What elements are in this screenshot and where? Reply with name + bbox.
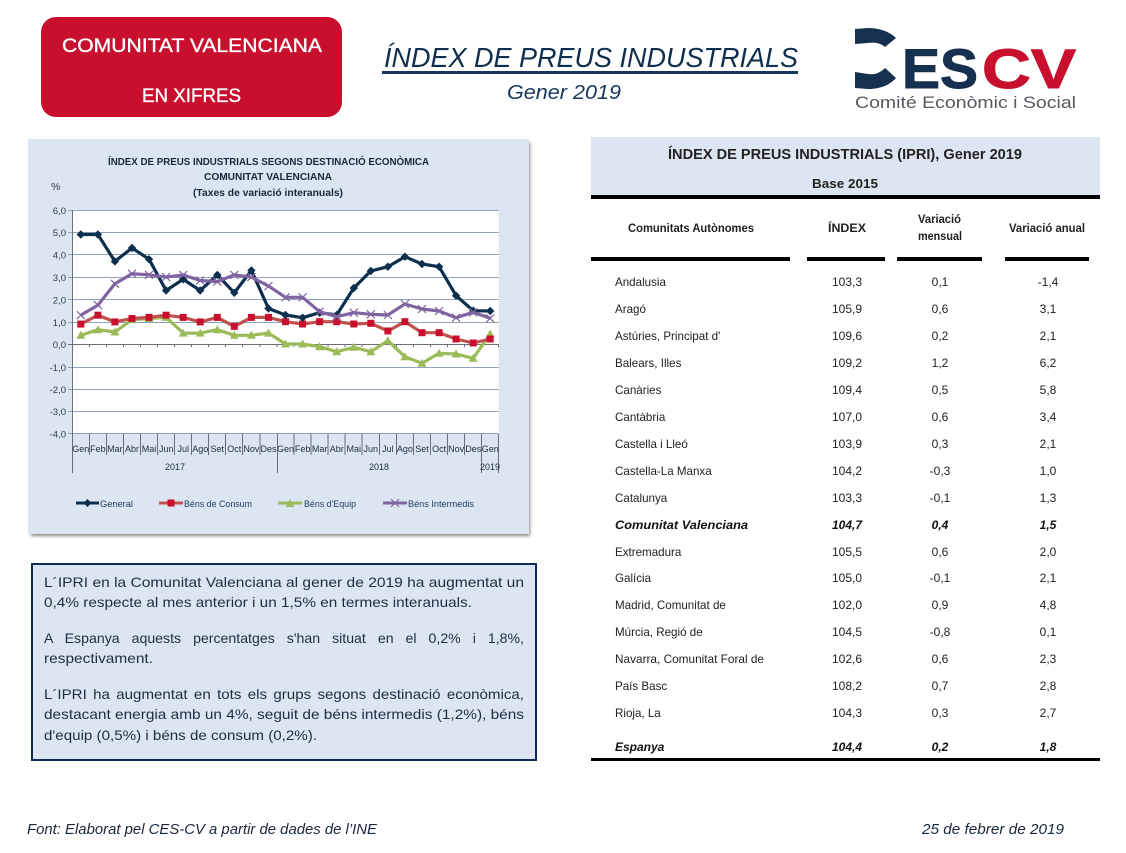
rows: Castella i Lleó	[615, 438, 688, 451]
x axis month labels: Des	[465, 444, 482, 454]
rows: 104,3	[832, 706, 862, 720]
gridlines and axes	[68, 210, 499, 473]
x axis month labels: Feb	[295, 444, 310, 454]
y axis labels: 0,0	[53, 340, 66, 351]
y axis labels: 6,0	[53, 206, 66, 217]
rows: 1,2	[932, 356, 949, 370]
rows: 109,2	[832, 356, 862, 370]
series: Béns de Consum	[81, 315, 490, 343]
rows: Andalusia	[615, 276, 666, 289]
paragraph 3: destacant energia amb un 4%, seguit de béns intermedis (1,2%), béns	[44, 706, 524, 722]
rows: 1,3	[1040, 491, 1057, 505]
column headers: mensual	[918, 231, 962, 243]
x axis month labels: Jun	[364, 444, 378, 454]
x axis month labels: Oct	[227, 444, 242, 454]
rows: 2,1	[1040, 437, 1057, 451]
paragraph 1: L´IPRI en la Comunitat Valenciana al gener de 2019 ha augmentat un	[44, 574, 524, 590]
rows: 0,1	[1040, 625, 1057, 639]
x axis month labels: Feb	[90, 444, 106, 454]
x axis month labels: Jun	[159, 444, 173, 454]
column headers: Variació anual	[1009, 223, 1085, 235]
x axis month labels: Set	[415, 444, 429, 454]
x axis month labels: Gen	[277, 444, 294, 454]
x axis month labels: Abr	[330, 444, 344, 454]
rows: 1,5	[1040, 518, 1057, 532]
series: Béns Intermedis	[81, 274, 490, 318]
y axis labels: 2,0	[53, 296, 66, 306]
rows: Extremadura	[615, 546, 682, 559]
rows: -0,1	[930, 571, 951, 585]
rows: 0,1	[932, 275, 949, 289]
subtitle: date: Gener 2019	[507, 81, 621, 104]
rows: 102,6	[832, 652, 862, 666]
rows: 109,4	[832, 383, 862, 397]
rows: Castella-La Manxa	[615, 465, 712, 478]
rows: -0,8	[930, 625, 951, 639]
total row: Espanya: 104,4	[832, 740, 862, 754]
table header band: Base 2015	[812, 176, 878, 191]
legend item: General	[76, 499, 133, 510]
badge: Comunitat Valenciana en xifres	[41, 17, 342, 117]
paragraph 3: d'equip (0,5%) i béns de consum (0,2%).	[44, 727, 317, 743]
rows: Balears, Illes	[615, 357, 682, 370]
total row: Espanya: 0,2	[932, 740, 949, 754]
x axis month labels: Nov	[448, 444, 465, 454]
legend item: Béns de Consum	[159, 499, 252, 510]
y axis labels	[50, 206, 66, 440]
y axis labels: -1,0	[50, 363, 66, 374]
rows: 2,8	[1040, 679, 1057, 693]
rows: 3,1	[1040, 302, 1057, 316]
rows: 105,9	[832, 302, 862, 316]
rows: 0,6	[932, 545, 949, 559]
rows: 6,2	[1040, 356, 1057, 370]
footer: source: Font: Elaborat pel CES-CV a partir de dades de l’INE	[27, 821, 378, 838]
legend item: Béns Intermedis: Béns Intermedis	[408, 499, 474, 510]
rows: 2,7	[1040, 706, 1057, 720]
rows: Múrcia, Regió de	[615, 626, 703, 639]
rows: -1,4	[1038, 275, 1059, 289]
rows: 1,0	[1040, 464, 1057, 478]
rows: 103,3	[832, 491, 862, 505]
y axis labels: 1,0	[53, 318, 66, 329]
rows: 107,0	[832, 410, 862, 424]
badge: Comunitat Valenciana en xifres: EN XIFRES	[142, 85, 241, 107]
table bottom rule	[591, 758, 1100, 761]
x axis month labels: Des	[260, 444, 277, 454]
rows: 0,3	[932, 437, 949, 451]
x axis month labels: Mai	[347, 444, 361, 454]
rows: 104,5	[832, 625, 862, 639]
rows: País Basc	[615, 680, 667, 693]
rows: 109,6	[832, 329, 862, 343]
chart title: ÍNDEX DE PREUS INDUSTRIALS SEGONS DESTINACIÓ ECONÒMICA	[108, 155, 429, 168]
rows: 2,1	[1040, 329, 1057, 343]
table header band: ÍNDEX DE PREUS INDUSTRIALS (IPRI), Gener 2019	[668, 146, 1022, 163]
x axis year labels: 2018	[369, 462, 389, 472]
rows: Galícia	[615, 572, 652, 585]
series: General	[81, 234, 490, 318]
rows: 0,9	[932, 598, 949, 612]
table header band	[591, 137, 1100, 199]
legend	[76, 499, 474, 510]
column headers: Variació	[918, 214, 961, 226]
rows: 5,8	[1040, 383, 1057, 397]
paragraph 1: 0,4% respecte al mes anterior i un 1,5% en termes interanuals.	[44, 594, 472, 610]
x axis month labels: Mai	[142, 444, 156, 454]
title: ÍNDEX DE PREUS INDUSTRIALS	[384, 42, 799, 73]
rows: Cantàbria	[615, 411, 666, 424]
rows: 3,4	[1040, 410, 1057, 424]
y axis labels: -3,0	[50, 407, 66, 418]
rows: 104,2	[832, 464, 862, 478]
y axis labels: -2,0	[50, 385, 66, 396]
y axis labels: 5,0	[53, 228, 66, 239]
total row: Espanya: 1,8	[1040, 740, 1057, 754]
x axis month labels	[72, 444, 499, 454]
rows: Canàries	[615, 384, 662, 397]
paragraph 1	[44, 574, 524, 610]
column headers	[591, 214, 1089, 261]
x axis month labels: Gen	[72, 444, 89, 454]
rows: Catalunya	[615, 492, 668, 505]
panel: data table	[591, 137, 1100, 761]
rows: 2,0	[1040, 545, 1057, 559]
rows: 0,6	[932, 652, 949, 666]
rows: 103,9	[832, 437, 862, 451]
text box: commentary	[32, 564, 536, 760]
paragraph 3: L´IPRI ha augmentat en tots els grups segons destinació econòmica,	[44, 686, 524, 702]
rows: Astúries, Principat d'	[615, 330, 720, 343]
y axis labels: 4,0	[53, 250, 66, 262]
x axis month labels: Jul	[177, 444, 189, 454]
panel: line chart	[28, 139, 530, 536]
x axis month labels: Ago	[192, 444, 208, 454]
rows: Madrid, Comunitat de	[615, 599, 726, 612]
paragraph 2: respectivament.	[44, 650, 153, 666]
legend item: General: General	[100, 499, 133, 510]
x axis month labels: Ago	[397, 444, 413, 454]
column headers: ÍNDEX	[828, 220, 866, 235]
rows: 0,6	[932, 302, 949, 316]
badge: Comunitat Valenciana en xifres: COMUNITAT VALENCIANA	[62, 35, 322, 57]
rows: Comunitat Valenciana	[615, 518, 748, 532]
rows: -0,1	[930, 491, 951, 505]
rows: 4,8	[1040, 598, 1057, 612]
rows	[615, 275, 1059, 720]
footer: date: 25 de febrer de 2019	[921, 821, 1065, 838]
rows: 103,3	[832, 275, 862, 289]
axis unit: %	[51, 181, 60, 193]
logo: CES-CV: ES	[902, 37, 978, 100]
logo: CES-CV	[855, 28, 1076, 112]
total row: Espanya	[615, 740, 1057, 754]
rows: Rioja, La	[615, 707, 661, 720]
y axis labels: 3,0	[53, 273, 66, 284]
x axis year labels: 2017	[165, 462, 185, 472]
rows: 0,5	[932, 383, 949, 397]
x axis year labels	[165, 462, 500, 472]
paragraph 2: A Espanya aquests percentatges s'han situat en el 0,2% i 1,8%,	[44, 630, 524, 646]
logo: CES-CV: CV	[982, 37, 1076, 100]
rows: Aragó	[615, 303, 646, 316]
x axis month labels: Nov	[243, 444, 260, 454]
rows: 0,2	[932, 329, 949, 343]
rows: 105,5	[832, 545, 862, 559]
rows: 0,7	[932, 679, 949, 693]
total row: Espanya: Espanya	[615, 740, 665, 754]
chart title: (Taxes de variació interanuals)	[193, 188, 343, 199]
legend item: Béns d'Equip: Béns d'Equip	[304, 499, 356, 510]
rows: 0,3	[932, 706, 949, 720]
rows: 102,0	[832, 598, 862, 612]
x axis month labels: Mar	[312, 444, 327, 454]
rows: 2,3	[1040, 652, 1057, 666]
logo: CES-CV: Comité Econòmic i Social	[855, 93, 1076, 112]
x axis month labels: Set	[211, 444, 225, 454]
rows: 2,1	[1040, 571, 1057, 585]
legend item: Béns de Consum: Béns de Consum	[184, 499, 252, 510]
rows: 0,4	[932, 518, 949, 532]
x axis month labels: Mar	[107, 444, 123, 454]
rows: 105,0	[832, 571, 862, 585]
x axis month labels: Abr	[125, 444, 139, 454]
series: Béns d'Equip	[81, 317, 490, 363]
paragraph 2	[44, 630, 524, 666]
rows: 104,7	[832, 518, 863, 532]
x axis year labels: 2019	[480, 462, 500, 472]
rows: Navarra, Comunitat Foral de	[615, 653, 764, 666]
chart title: COMUNITAT VALENCIANA	[204, 172, 332, 183]
chart title	[108, 155, 429, 199]
x axis month labels: Jul	[382, 444, 394, 454]
legend item: Béns d'Equip	[278, 499, 356, 510]
y axis labels: -4,0	[50, 430, 66, 440]
x axis month labels: Oct	[432, 444, 447, 454]
paragraph 3	[44, 686, 524, 743]
rows: 0,6	[932, 410, 949, 424]
rows: -0,3	[930, 464, 951, 478]
rows: 108,2	[832, 679, 862, 693]
column headers: Comunitats Autònomes	[628, 223, 754, 235]
plot area	[72, 210, 499, 434]
x axis month labels: Gen	[482, 444, 499, 454]
